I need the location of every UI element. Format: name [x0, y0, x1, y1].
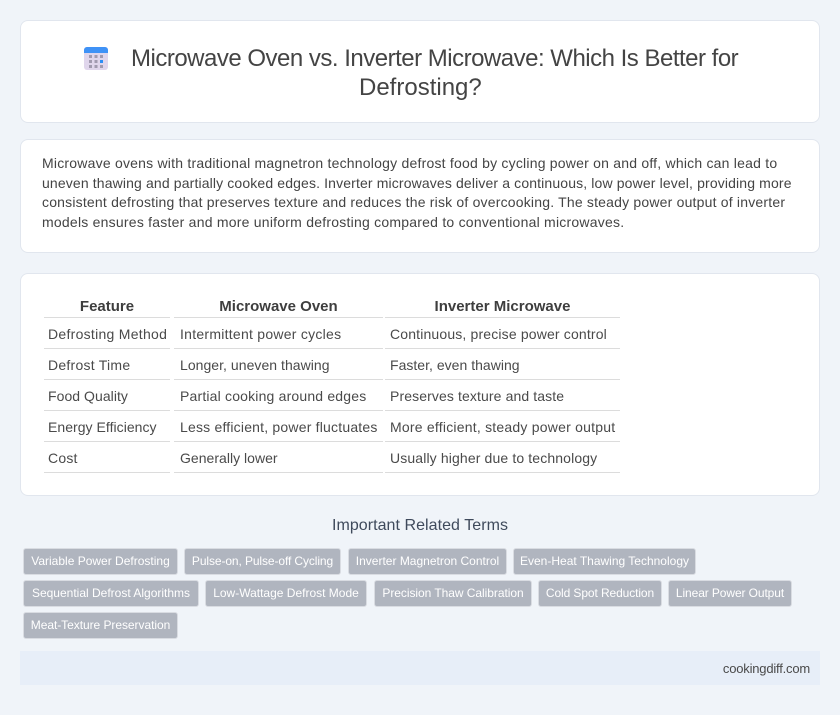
intro paragraph: models ensures faster and more uniform defrosting compared to conventional microwaves. [42, 214, 624, 230]
comparison table: Continuous, precise power control [390, 326, 607, 342]
related terms tags [23, 548, 792, 639]
footer source: cookingdiff.com [723, 661, 810, 676]
comparison table: Defrosting Method [48, 326, 167, 342]
panel: comparison table [20, 273, 820, 496]
comparison table: Feature [80, 298, 134, 315]
comparison table: Energy Efficiency [48, 419, 157, 435]
comparison table: Partial cooking around edges [180, 388, 366, 404]
comparison table: Intermittent power cycles [180, 326, 341, 342]
comparison table: Microwave Oven [219, 298, 338, 315]
title: Defrosting? [359, 74, 482, 101]
comparison table: Longer, uneven thawing [180, 357, 330, 373]
footer bar [20, 651, 820, 685]
related terms tags: Even-Heat Thawing Technology [520, 554, 689, 568]
icon: calendar [84, 47, 108, 70]
related terms tags: Low-Wattage Defrost Mode [213, 586, 359, 600]
intro paragraph: uneven thawing and partially cooked edges. Inverter microwaves deliver a continuous, low power level, providing more [42, 175, 792, 191]
comparison table: More efficient, steady power output [390, 419, 615, 435]
related terms tags: Variable Power Defrosting [31, 554, 170, 568]
comparison table: Food Quality [48, 388, 128, 404]
intro paragraph: consistent defrosting that preserves texture and reduces the risk of overcooking. The steady power output of inverter [42, 194, 785, 210]
intro paragraph: Microwave ovens with traditional magnetron technology defrost food by cycling power on and off, which can lead to [42, 155, 777, 171]
related terms heading: Important Related Terms [332, 517, 508, 534]
comparison table: Preserves texture and taste [390, 388, 564, 404]
comparison table: Usually higher due to technology [390, 450, 597, 466]
related terms tags: Cold Spot Reduction [546, 586, 654, 600]
comparison table: Generally lower [180, 450, 278, 466]
comparison table: Defrost Time [48, 357, 130, 373]
comparison table: Less efficient, power fluctuates [180, 419, 378, 435]
panel: intro text [20, 139, 820, 253]
intro paragraph [42, 155, 792, 230]
comparison table: Faster, even thawing [390, 357, 520, 373]
related terms tags: Precision Thaw Calibration [382, 586, 524, 600]
comparison table: Cost [48, 450, 78, 466]
related terms tags: Inverter Magnetron Control [356, 554, 499, 568]
related terms tags: Meat-Texture Preservation [31, 618, 170, 632]
title: Microwave Oven vs. Inverter Microwave: Which Is Better for [131, 45, 738, 72]
related terms tags: Sequential Defrost Algorithms [32, 586, 190, 600]
comparison table: Inverter Microwave [435, 298, 570, 315]
related terms tags: Linear Power Output [676, 586, 784, 600]
panel: title card [20, 20, 820, 123]
title [131, 45, 738, 101]
related terms tags: Pulse-on, Pulse-off Cycling [192, 554, 333, 568]
comparison table [44, 298, 620, 473]
